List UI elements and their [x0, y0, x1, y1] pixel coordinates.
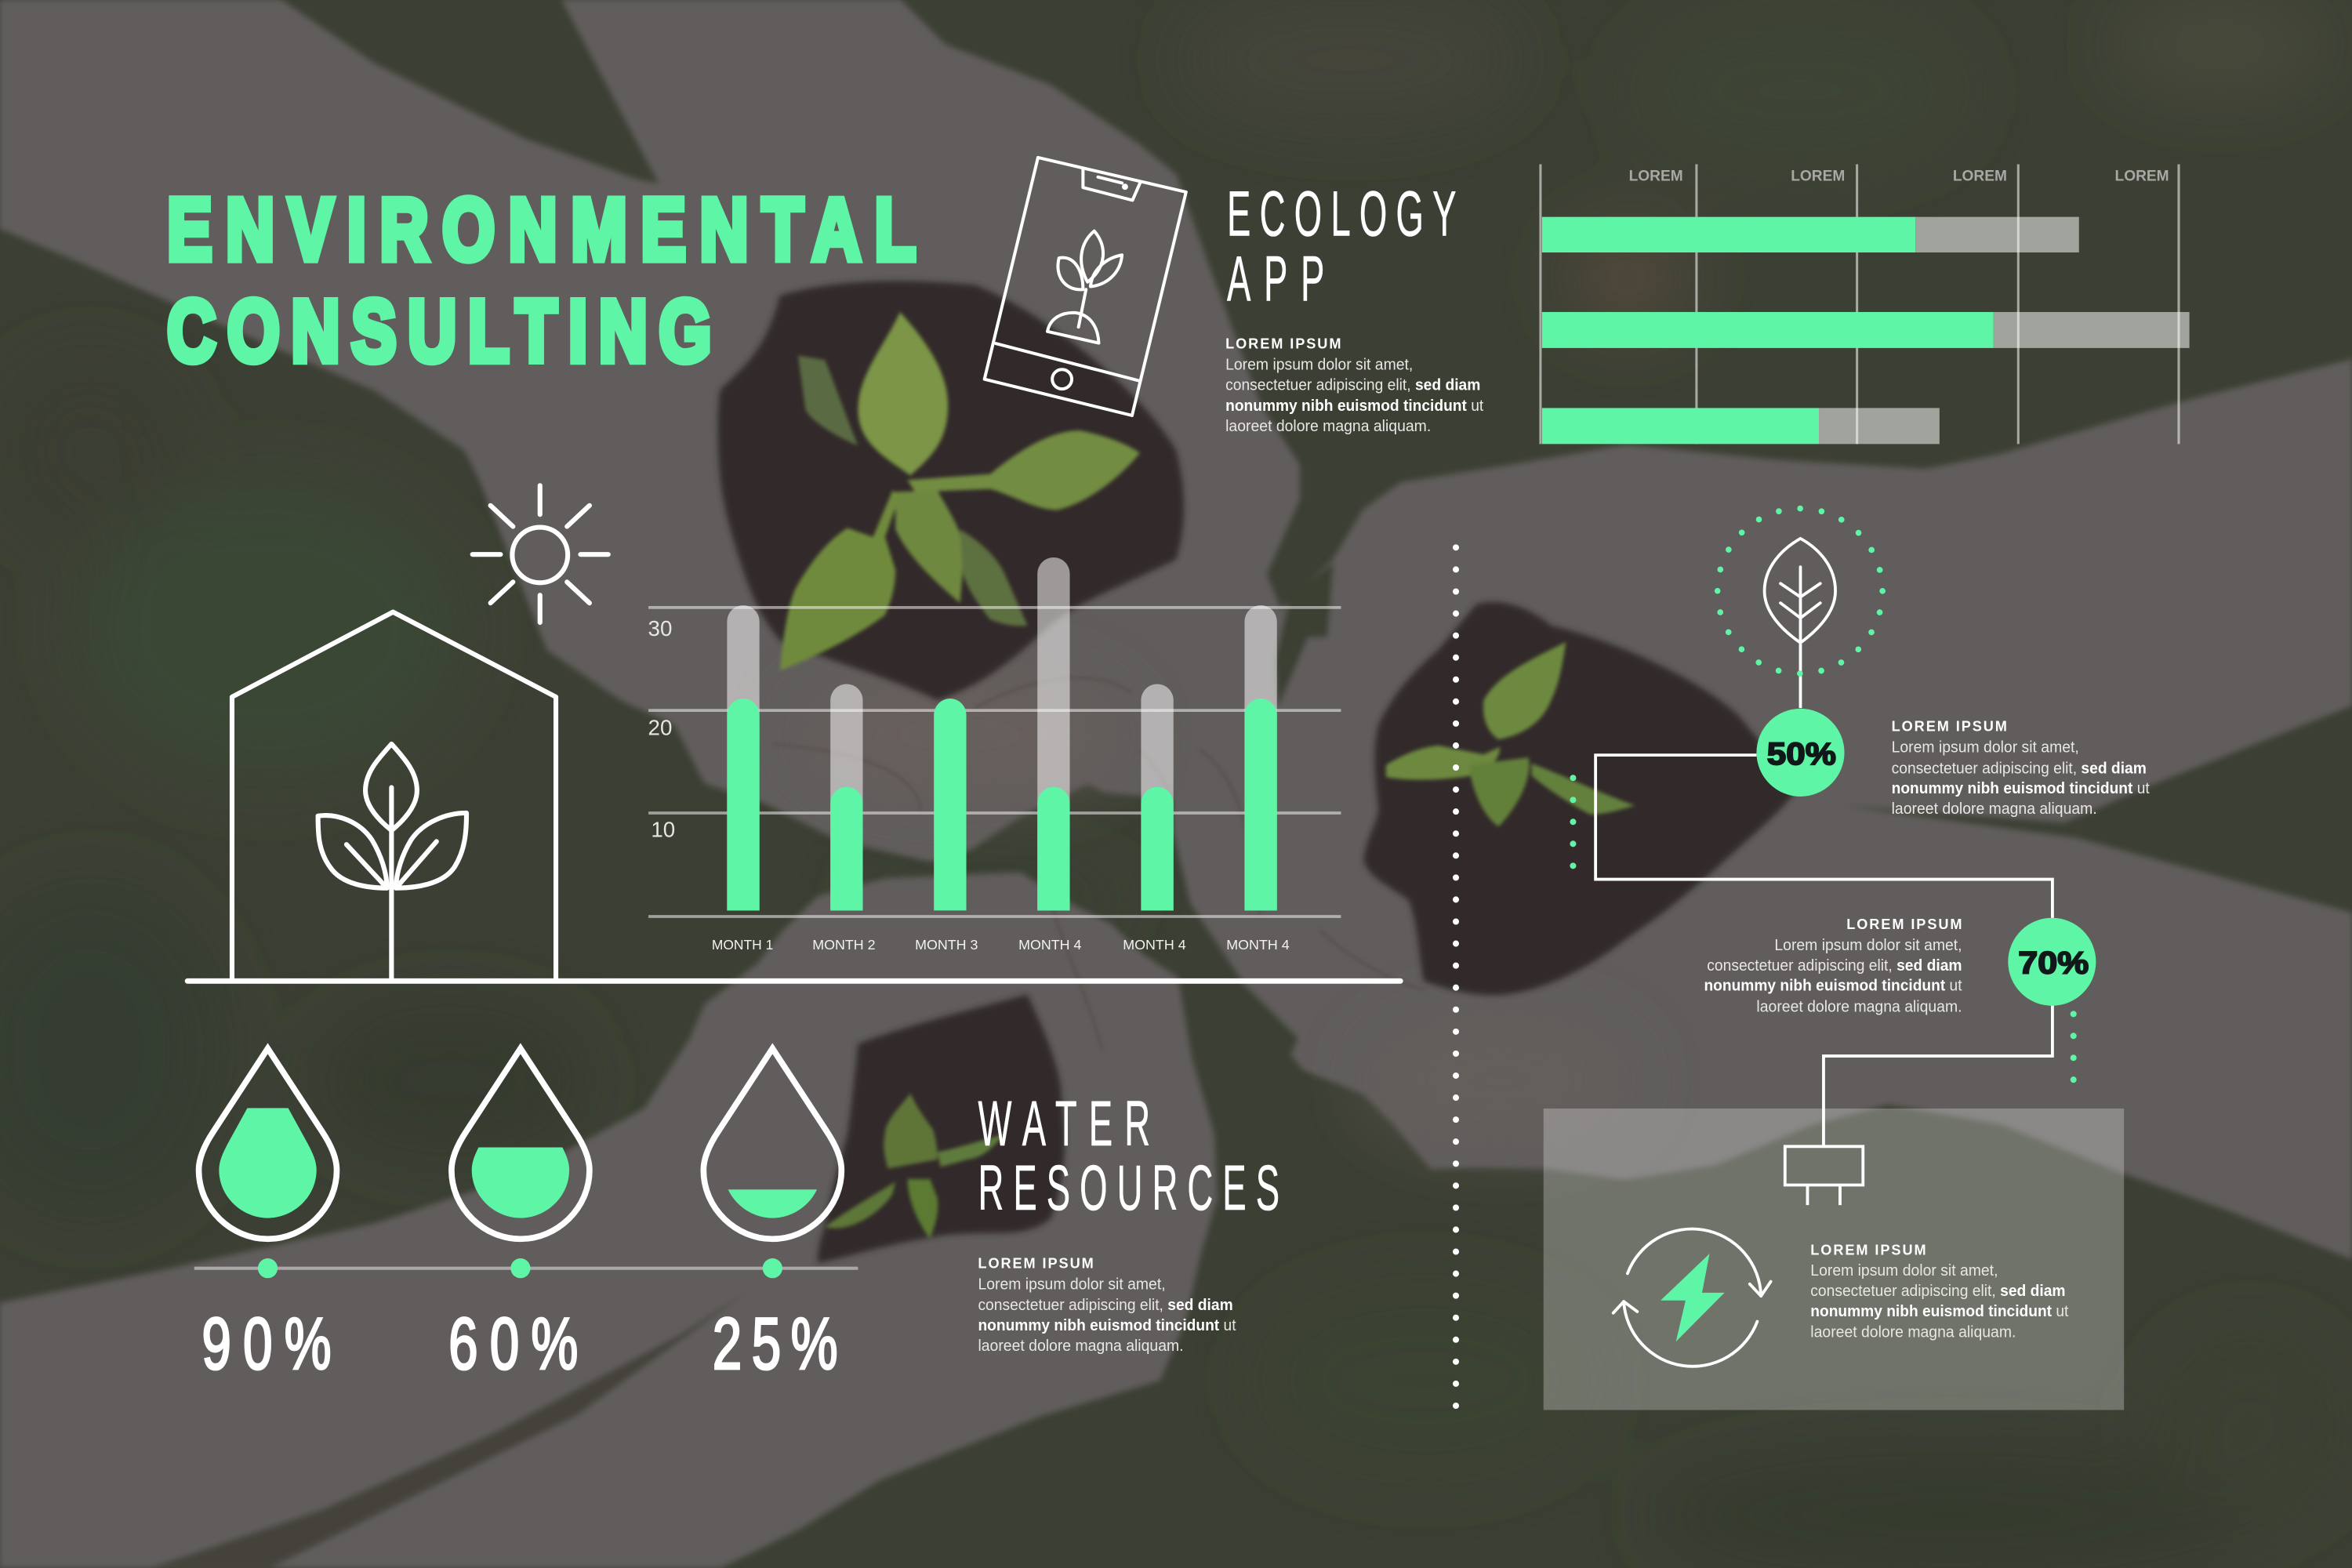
vertical dotted divider — [1454, 547, 1457, 1407]
horizontal bar chart — [1541, 165, 2190, 444]
heading: water resources — [978, 1087, 1279, 1223]
flow connector lines — [1595, 642, 2053, 1146]
text block: water resources: laoreet dolore magna aliquam. — [978, 1338, 1184, 1355]
green dots right — [2072, 1014, 2075, 1080]
text block: ecology app: Lorem ipsum dolor sit amet, — [1225, 357, 1413, 374]
text block: 50%: laoreet dolore magna aliquam. — [1892, 800, 2097, 818]
text block: 50%: nonummy nibh euismod tincidunt ut — [1892, 780, 2150, 797]
horizontal bar chart: LOREM — [2115, 168, 2169, 184]
badge: 70% — [2008, 918, 2096, 1006]
heading: ecology app — [1227, 177, 1457, 314]
text block: ecology app: nonummy nibh euismod tincidunt ut — [1225, 397, 1484, 415]
icon: drop 60% — [452, 1048, 590, 1239]
text block: energy: nonummy nibh euismod tincidunt ut — [1810, 1303, 2069, 1320]
badge: 50%: 50% — [1767, 736, 1836, 771]
icon: leaf in dotted ring — [1718, 509, 1882, 673]
text block: 70%: consectetuer adipiscing elit, sed diam — [1707, 957, 1962, 975]
title: ENVIRONMENTAL — [167, 180, 916, 278]
text block: ecology app: laoreet dolore magna aliquam. — [1225, 418, 1431, 435]
ground line — [187, 979, 1400, 982]
badge: 70%: 70% — [2018, 945, 2089, 980]
text block: ecology app — [1225, 336, 1484, 435]
text block: 70%: nonummy nibh euismod tincidunt ut — [1704, 978, 1962, 995]
heading: ecology app: ECOLOGY — [1227, 177, 1457, 249]
heading: ecology app: APP — [1227, 243, 1324, 314]
icon: greenhouse with plant — [232, 612, 556, 981]
column chart — [648, 557, 1341, 953]
text block: energy: LOREM IPSUM — [1810, 1242, 1926, 1258]
green dots left — [1571, 778, 1575, 867]
text block: water resources: consectetuer adipiscing elit, sed diam — [978, 1297, 1233, 1314]
percentages — [201, 1303, 838, 1385]
title: CONSULTING — [167, 281, 711, 379]
text block: water resources — [978, 1256, 1236, 1355]
percentages: 25% — [713, 1303, 838, 1385]
column chart: MONTH 4 — [1226, 937, 1290, 953]
column chart: MONTH 4 — [1018, 937, 1082, 953]
seedlings — [858, 312, 948, 476]
column chart: MONTH 3 — [915, 937, 978, 953]
text block: energy: Lorem ipsum dolor sit amet, — [1810, 1262, 1998, 1279]
text block: 50%: Lorem ipsum dolor sit amet, — [1892, 739, 2079, 757]
column chart: MONTH 1 — [712, 937, 773, 953]
icon: ecology phone with plant — [985, 158, 1186, 416]
text block: 70%: Lorem ipsum dolor sit amet, — [1774, 937, 1962, 954]
text block: ecology app: LOREM IPSUM — [1225, 336, 1341, 352]
icon: drop 25% — [703, 1048, 841, 1239]
text block: 70% — [1704, 916, 1962, 1016]
badge: 50% — [1756, 709, 1845, 797]
percentages: 90% — [201, 1303, 332, 1385]
text block: water resources: LOREM IPSUM — [978, 1256, 1094, 1272]
icon: energy cycle with bolt — [1613, 1229, 1771, 1367]
horizontal bar chart: LOREM — [1953, 168, 2007, 184]
text block: energy — [1810, 1242, 2069, 1341]
text block: energy: laoreet dolore magna aliquam. — [1810, 1324, 2016, 1341]
text block: 50%: LOREM IPSUM — [1892, 719, 2007, 735]
heading: water resources: RESOURCES — [978, 1152, 1279, 1223]
column chart: MONTH 4 — [1123, 937, 1186, 953]
icon: plug — [1785, 1146, 1863, 1205]
horizontal bar chart: LOREM — [1629, 168, 1683, 184]
text block: water resources: Lorem ipsum dolor sit amet, — [978, 1276, 1166, 1293]
text block: ecology app: consectetuer adipiscing elit, sed diam — [1225, 376, 1480, 394]
column chart: 30 — [648, 616, 672, 641]
heading: water resources: WATER — [978, 1087, 1150, 1159]
column chart: 20 — [648, 716, 672, 740]
title — [167, 180, 916, 379]
slider line with markers — [194, 1258, 858, 1278]
icon: drop 90% — [199, 1048, 337, 1239]
text block: 50% — [1892, 719, 2150, 818]
text block: 50%: consectetuer adipiscing elit, sed diam — [1892, 760, 2147, 777]
gaps between arms and fingers — [151, 1290, 750, 1567]
water drops — [199, 1048, 841, 1239]
column chart: 10 — [651, 818, 675, 842]
soil — [717, 281, 1184, 700]
text block: water resources: nonummy nibh euismod tincidunt ut — [978, 1317, 1236, 1334]
text block: 70%: LOREM IPSUM — [1846, 916, 1962, 932]
text block: 70%: laoreet dolore magna aliquam. — [1756, 999, 1962, 1016]
percentages: 60% — [448, 1303, 578, 1385]
icon: sun — [473, 485, 608, 622]
panel: energy — [1544, 1109, 2124, 1410]
column chart: MONTH 2 — [812, 937, 876, 953]
text block: energy: consectetuer adipiscing elit, sed diam — [1810, 1283, 2066, 1300]
horizontal bar chart: LOREM — [1791, 168, 1845, 184]
